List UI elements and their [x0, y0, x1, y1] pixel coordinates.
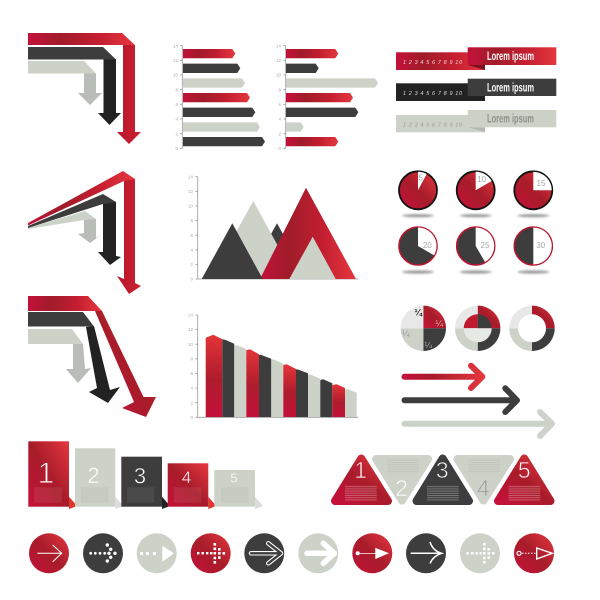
- icon: squares and play arrow: [137, 533, 177, 573]
- dial 15: [514, 171, 552, 217]
- dial 5: [399, 171, 437, 217]
- columns: [206, 335, 357, 417]
- bent arrows: flat: [28, 33, 141, 144]
- axis: 0: [190, 415, 193, 420]
- axis: 2: [278, 131, 281, 136]
- icon: outlined arrow: [244, 533, 284, 573]
- triangle 5: [498, 457, 550, 501]
- grey long arrow: [404, 412, 552, 436]
- dial 20: [399, 227, 437, 274]
- ribbon banners: [396, 47, 556, 132]
- pie with fractions: ¼: [402, 328, 410, 338]
- grey arrow: [28, 211, 101, 243]
- tab 2: 2: [87, 463, 100, 488]
- axis: 14: [188, 174, 193, 179]
- triangle 3: [416, 457, 469, 501]
- tab 5: 5: [230, 470, 238, 486]
- dark long arrow: [404, 388, 517, 412]
- grey banner: Lorem ipsum: [487, 114, 534, 126]
- pie with fractions: ¼: [415, 308, 424, 318]
- icon: outlined play arrow: [514, 533, 554, 573]
- numbered tabs: [28, 441, 263, 509]
- red banner: [396, 47, 556, 70]
- axis: 2: [190, 400, 193, 405]
- icon: dot-grid arrow: [191, 533, 231, 573]
- small dark peak: [246, 223, 308, 279]
- bent arrows: descending: [28, 296, 156, 417]
- axis: 6: [278, 102, 281, 107]
- triangle 1: [335, 457, 388, 501]
- dial 10: 10: [477, 175, 487, 184]
- triangle 2: [376, 458, 428, 501]
- axis: 2: [190, 262, 193, 267]
- icon: dotted arrow: [83, 533, 123, 573]
- triangle 3: 3: [436, 457, 449, 483]
- icon: pin arrow: [352, 533, 392, 573]
- tab 1: [28, 441, 77, 509]
- tab 3: [121, 457, 170, 509]
- triangle 1: 1: [354, 457, 367, 483]
- triangle 4: [458, 458, 510, 501]
- dial 25: [457, 227, 495, 274]
- bar chart: mixed arrows: [276, 43, 378, 151]
- dial 25: 25: [481, 241, 490, 250]
- icon: light dot-grid arrow: [460, 533, 500, 573]
- pie with fractions: ¼: [425, 340, 433, 350]
- grey peak: [210, 201, 296, 279]
- axis: 4: [190, 248, 193, 252]
- dark banner: Lorem ipsum: [487, 82, 534, 94]
- axis: [188, 313, 358, 420]
- axis: 0: [278, 146, 281, 151]
- pie with fractions: ¼: [436, 318, 444, 328]
- triangle 5: 5: [518, 457, 531, 483]
- icon: thin arrow: [29, 533, 69, 573]
- axis: 4: [175, 117, 178, 122]
- axis: 12: [188, 189, 193, 194]
- triangle 2: 2: [395, 475, 408, 501]
- dark arrow: [28, 194, 121, 265]
- bars: [183, 49, 265, 146]
- dial 10: [457, 171, 495, 217]
- axis: 8: [175, 87, 178, 92]
- axis: 10: [188, 204, 193, 209]
- dark arrow: [28, 47, 121, 125]
- axis: 10: [173, 73, 178, 78]
- tab 4: [168, 463, 216, 509]
- numbered triangles: [335, 457, 550, 501]
- timer dials: [399, 171, 552, 274]
- axis: 2: [175, 131, 178, 136]
- dial 15: 15: [537, 179, 546, 188]
- grey arrow: [28, 329, 91, 383]
- tab 3: 3: [134, 464, 146, 488]
- grey banner: [396, 110, 556, 132]
- dark peak: [202, 223, 263, 279]
- axis: 4: [278, 117, 281, 122]
- axis: 0: [190, 277, 193, 282]
- axis: 12: [188, 327, 193, 332]
- bent arrows: rising: [28, 171, 141, 294]
- dark arrow: [28, 312, 120, 403]
- tab 5: [214, 470, 263, 509]
- bar chart: descending arrows: [173, 43, 265, 151]
- pie with fractions: [401, 306, 446, 351]
- axis: 10: [276, 73, 281, 78]
- pie with inner ring: [455, 306, 500, 351]
- dial 5: 5: [418, 174, 423, 182]
- red arrow: [28, 171, 141, 294]
- quarter pies: [401, 306, 555, 351]
- axis: 14: [173, 43, 178, 48]
- axis: 8: [190, 356, 193, 361]
- inner grey peak: [289, 237, 336, 279]
- red banner: 1 2 3 4 5 6 7 8 9 10: [403, 60, 463, 66]
- tab 2: [75, 448, 124, 509]
- axis: 14: [188, 313, 193, 318]
- red arrow: [28, 296, 156, 417]
- axis: 4: [190, 386, 193, 391]
- axis: [276, 43, 286, 151]
- long arrows: [404, 366, 552, 436]
- axis: 12: [276, 58, 281, 63]
- axis: 0: [175, 146, 178, 151]
- tab 1: 1: [38, 457, 54, 490]
- axis: 8: [278, 87, 281, 92]
- axis: [188, 174, 358, 282]
- grey arrow: [28, 61, 102, 105]
- dial 30: [514, 227, 552, 274]
- bars: [286, 49, 378, 146]
- dark banner: 1 2 3 4 5 6 7 8 9 10: [403, 91, 463, 97]
- axis: 10: [188, 342, 193, 347]
- red banner: Lorem ipsum: [487, 51, 534, 63]
- dark banner: [396, 79, 556, 101]
- icon: bold arrow: [298, 533, 338, 573]
- icon: forked arrow: [406, 533, 446, 573]
- donut: [509, 306, 555, 351]
- axis: 6: [190, 371, 193, 376]
- axis: 14: [276, 43, 281, 48]
- red arrow: [28, 33, 141, 144]
- round arrow icons: [29, 533, 554, 573]
- axis: [173, 43, 182, 151]
- dial 30: 30: [536, 241, 546, 250]
- tab 4: 4: [182, 468, 191, 487]
- axis: 12: [173, 58, 178, 63]
- triangle chart: [188, 174, 358, 282]
- axis: 8: [190, 218, 193, 223]
- axis: 6: [190, 233, 193, 238]
- dial 20: 20: [423, 241, 432, 250]
- axis: 6: [175, 102, 178, 107]
- triangle 4: 4: [477, 475, 490, 501]
- column chart: [188, 313, 358, 420]
- grey banner: 1 2 3 4 5 6 7 8 9 10: [403, 122, 463, 128]
- red peak: [260, 188, 356, 279]
- red long arrow: [404, 366, 482, 388]
